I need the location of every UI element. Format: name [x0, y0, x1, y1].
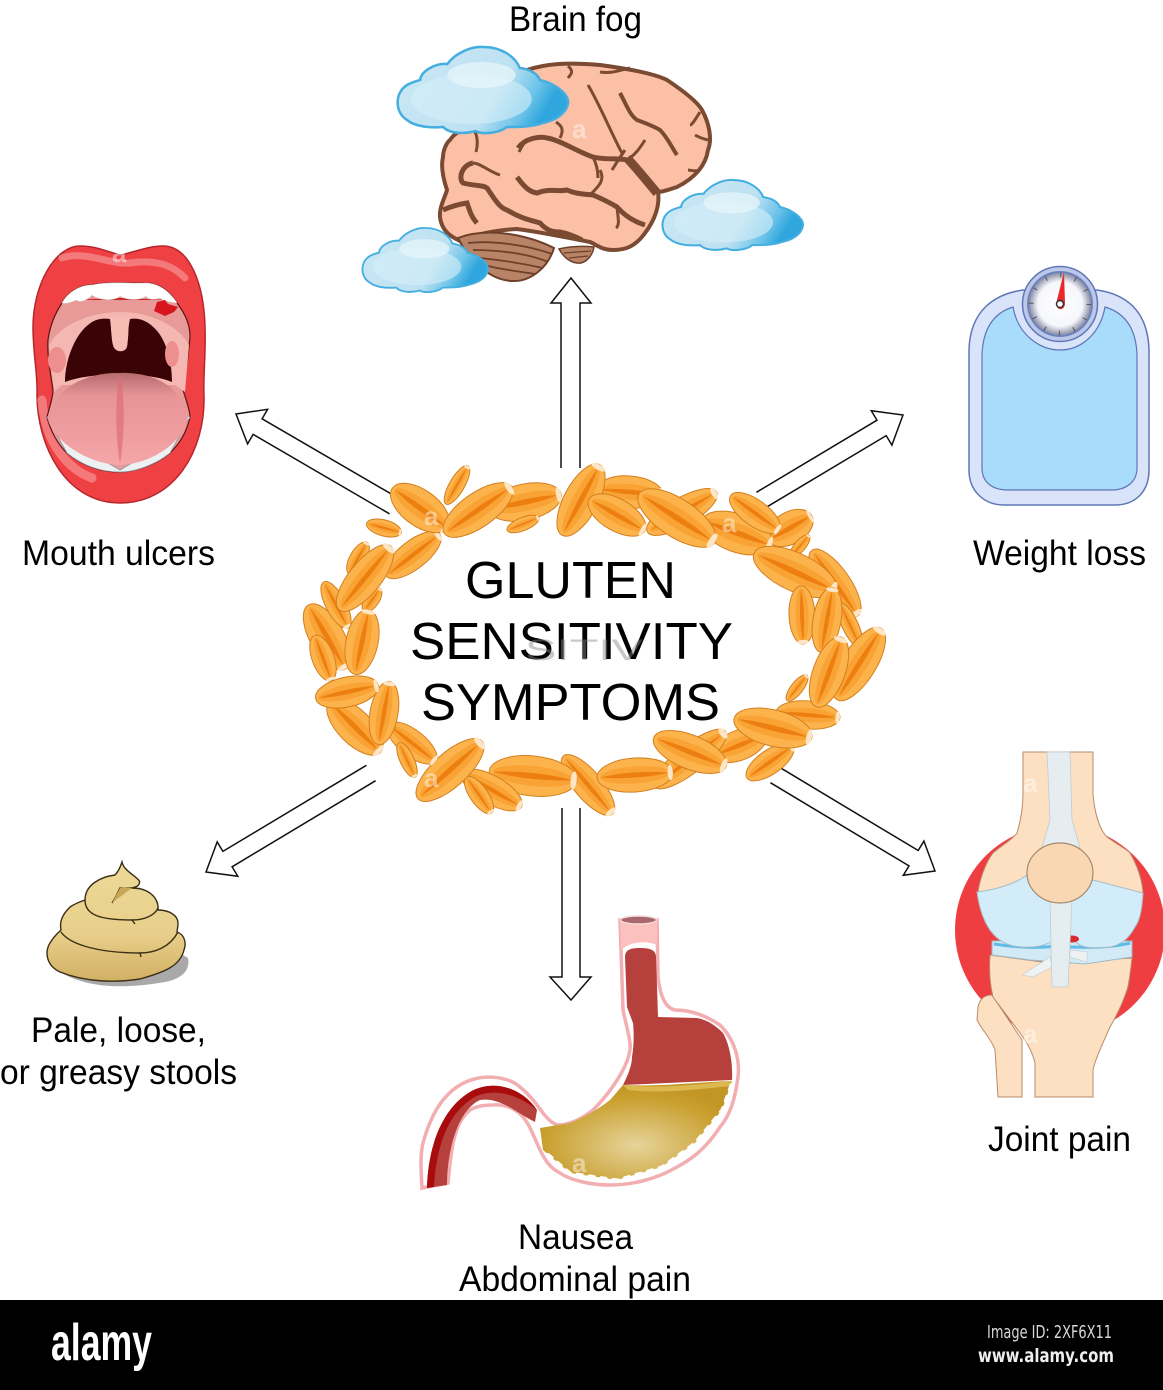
icon: open mouth with ulcer	[33, 246, 205, 503]
label: Pale, loose, or greasy stools: Pale, loose,	[31, 1011, 206, 1050]
stomach wall	[421, 920, 738, 1188]
shadow	[60, 950, 188, 986]
gum line	[66, 298, 178, 304]
cartilage right	[1060, 880, 1143, 948]
red spot	[1065, 936, 1079, 942]
cerebrum	[440, 64, 710, 250]
alamy logo: alamy	[51, 1314, 152, 1372]
tibia	[990, 955, 1132, 1097]
watermark overlay: a	[572, 114, 587, 144]
icon: stomach	[421, 916, 738, 1188]
quadriceps tendon	[1042, 752, 1080, 848]
yellow contents	[540, 1081, 732, 1180]
femur	[978, 752, 1143, 905]
icon: brain with clouds	[362, 47, 803, 292]
esophagus opening	[620, 920, 657, 950]
watermark overlay	[112, 114, 1038, 1178]
watermark overlay: a	[1023, 768, 1038, 798]
yellow surface	[623, 1081, 732, 1091]
label: Brain fog: Brain fog	[509, 0, 642, 39]
watermark overlay: a	[112, 238, 127, 268]
coil lines	[61, 888, 178, 957]
swirl shade	[112, 888, 132, 903]
scalloped lining	[543, 1085, 731, 1180]
icon: knee joint	[955, 752, 1163, 1097]
scale body	[969, 290, 1149, 505]
body	[47, 862, 185, 981]
footer bar	[0, 1300, 1163, 1390]
arrow: to weight loss	[756, 411, 903, 508]
duodenum outer stripe	[427, 1086, 537, 1188]
cloud: lower left	[362, 228, 488, 292]
throat	[65, 319, 172, 382]
label: Weight loss: Weight loss	[973, 534, 1146, 573]
lips	[33, 246, 205, 503]
palate	[49, 312, 189, 392]
label: Joint pain: Joint pain	[988, 1120, 1131, 1159]
lower teeth	[47, 413, 190, 472]
watermark overlay: a	[424, 763, 439, 793]
scale platform	[982, 307, 1137, 490]
cruciate ligament	[1022, 950, 1087, 977]
arrow: to joint pain	[770, 767, 935, 875]
upper teeth	[62, 283, 177, 303]
label: Nausea, Abdominal pain	[459, 1218, 691, 1299]
icon: stool	[47, 862, 188, 986]
arrow: down to stomach	[550, 808, 591, 1000]
patellar ligament	[1050, 900, 1072, 987]
watermark overlay: a	[424, 501, 439, 531]
icon: weighing scale	[969, 266, 1149, 505]
meniscus	[992, 941, 1132, 964]
lip highlights	[62, 256, 185, 278]
label: Mouth ulcers: Mouth ulcers	[22, 534, 215, 573]
tongue	[48, 373, 188, 465]
cerebellum	[458, 233, 594, 281]
website: www.alamy.com	[978, 1345, 1114, 1367]
uvula	[110, 316, 128, 351]
arrow: to mouth ulcers	[236, 409, 398, 514]
image id: Image ID: 2XF6X11	[987, 1322, 1112, 1343]
grain ring	[294, 457, 896, 823]
label: Nausea, Abdominal pain: Nausea	[518, 1218, 634, 1257]
label: Pale, loose, or greasy stools: or greasy stools	[0, 1053, 237, 1092]
watermark overlay: SITIV	[525, 634, 643, 667]
mouth cavity	[47, 283, 190, 472]
watermark overlay: a	[1023, 1019, 1038, 1049]
title: SYMPTOMS	[421, 674, 720, 732]
label: Nausea, Abdominal pain: Abdominal pain	[459, 1260, 691, 1299]
cloud: upper left	[398, 47, 568, 133]
cloud: right	[663, 180, 803, 250]
watermark overlay: a	[722, 508, 737, 538]
duodenum lining	[427, 1086, 537, 1188]
patella	[1027, 843, 1093, 903]
title: SENSITIVITY	[410, 613, 733, 671]
dial	[1022, 266, 1098, 342]
title: GLUTEN	[465, 552, 676, 610]
arrow: to stools	[206, 765, 376, 876]
title	[410, 552, 733, 732]
tonsils	[48, 347, 66, 373]
cartilage left	[977, 875, 1060, 947]
watermark overlay: a	[572, 1148, 587, 1178]
red pain circle	[955, 825, 1163, 1035]
acid red upper	[623, 948, 732, 1085]
fibula	[977, 995, 1022, 1097]
arrow: up to brain fog	[551, 278, 591, 468]
label: Pale, loose, or greasy stools	[0, 1011, 237, 1092]
ulcer	[154, 300, 178, 316]
